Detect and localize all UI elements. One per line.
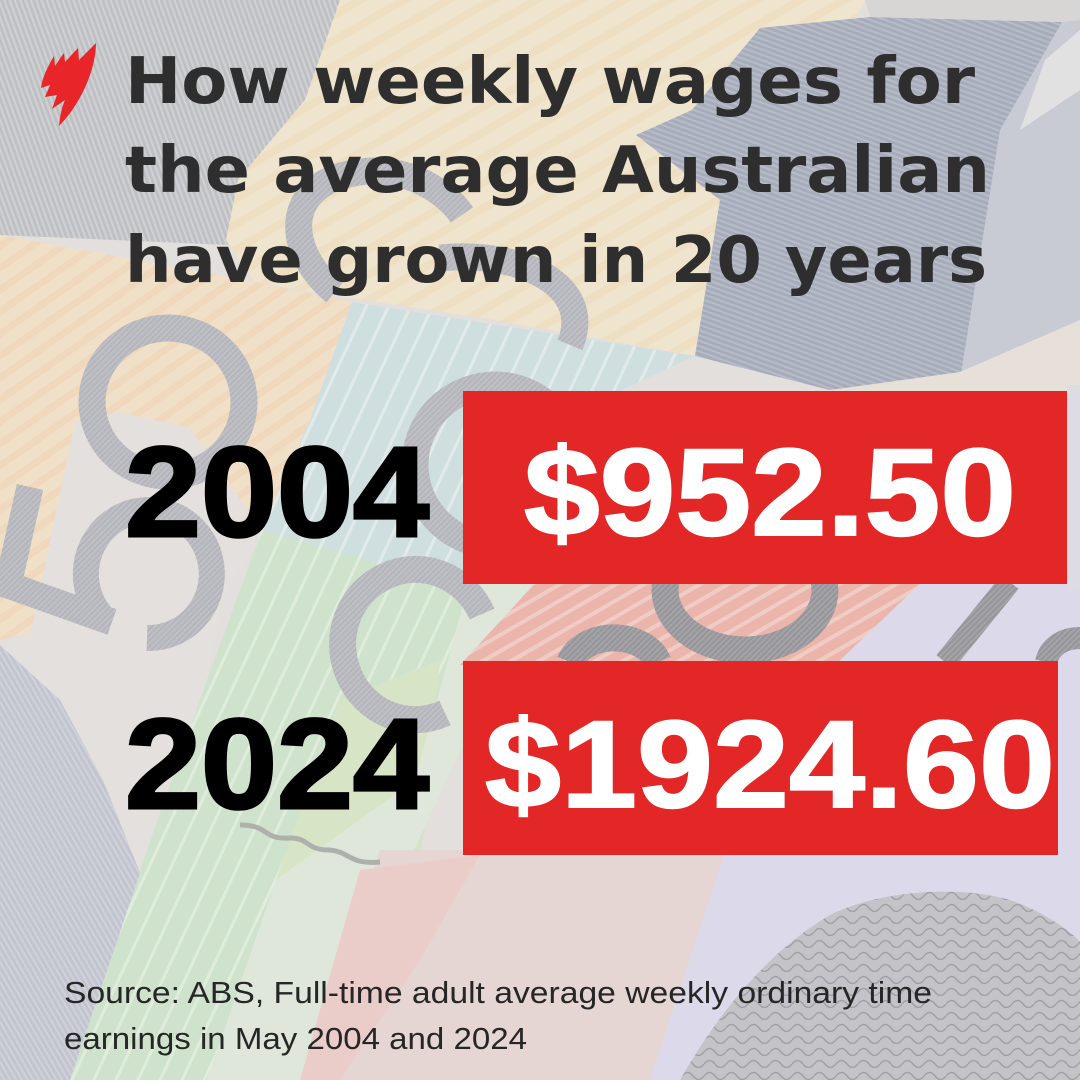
value box 2004: $952.50: [524, 424, 1016, 562]
title: the average Australian: [125, 134, 990, 208]
banknote: white strip: [207, 580, 540, 1080]
year label 2024: 2024: [125, 693, 429, 836]
title: How weekly wages for: [125, 45, 975, 119]
banknote: red strip: [460, 580, 924, 665]
value box 2024: $1924.60: [485, 696, 1055, 834]
value box 2004: [463, 391, 1067, 584]
source note: earnings in May 2004 and 2024: [64, 1021, 527, 1056]
year label 2004: 2004: [125, 421, 429, 564]
banknote: top-left grey engraving: [0, 0, 342, 245]
portrait hair: [680, 892, 1080, 1080]
value box 2024: [463, 661, 1058, 855]
watermark numerals: [8, 171, 1080, 720]
banknote: lavender note: [650, 855, 1080, 1080]
banknote: left peach: [0, 235, 352, 640]
banknote: top peach: [226, 0, 865, 356]
source note: Source: ABS, Full-time adult average weekly ordinary time: [64, 975, 932, 1010]
banknote: lower pinkish note: [300, 850, 730, 1080]
title: [125, 45, 990, 298]
title: have grown in 20 years: [125, 224, 987, 298]
banknote: pale centre note: [0, 412, 262, 870]
source note: [64, 975, 932, 1056]
signature: [240, 825, 380, 862]
banknote: centre blue and green: [262, 302, 695, 590]
icon: SBS logo: [41, 43, 96, 126]
banknote: top-right slate: [636, 17, 1062, 390]
row: 2024 wage: [125, 661, 1058, 855]
row: 2004 wage: [125, 391, 1067, 584]
banknote: lower-left lilac: [0, 645, 140, 1080]
